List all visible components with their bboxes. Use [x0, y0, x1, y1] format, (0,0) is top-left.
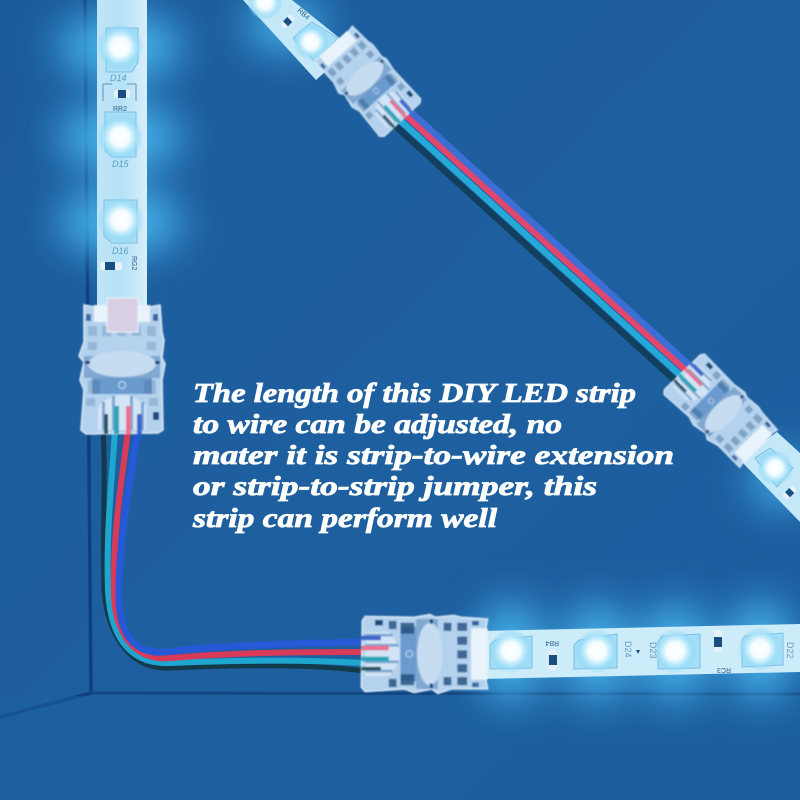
LED strip: bottom horizontal	[480, 624, 800, 679]
resistor RB4: RB4	[296, 7, 311, 22]
caption text: or strip-to-strip jumper, this	[193, 471, 597, 501]
strip labels and resistors: D23	[648, 642, 658, 659]
icon: RGB chip inside connector	[107, 298, 138, 332]
strip labels and resistors: RB4	[545, 639, 559, 646]
resistor right	[782, 485, 797, 500]
caption text: The length of this DIY LED strip	[193, 378, 636, 408]
strip labels and resistors: D15	[112, 159, 130, 169]
icon: LED right	[755, 448, 793, 487]
connector: left vertical	[79, 298, 165, 434]
strip labels and resistors: RR2	[113, 106, 127, 113]
LED strip: left vertical	[97, 0, 147, 312]
icon: LED D22	[738, 627, 783, 671]
icon: LED D23	[653, 629, 700, 673]
LED strip: top diagonal	[243, 0, 352, 80]
strip labels and resistors: RG2	[130, 256, 137, 270]
icon: LED D24	[574, 629, 619, 673]
caption text: to wire can be adjusted, no	[193, 409, 562, 439]
strip labels and resistors: D22	[785, 642, 795, 659]
connector: bottom horizontal	[361, 614, 488, 694]
caption text: strip can perform well	[192, 503, 498, 533]
strip labels and resistors: RC3	[717, 666, 731, 673]
icon: LED D15	[97, 112, 143, 160]
icon: LED D16	[98, 197, 144, 243]
strip labels and resistors: D14	[110, 73, 127, 83]
icon: LED D14	[97, 24, 143, 72]
strip labels and resistors: D24	[623, 641, 633, 658]
icon: LED upper	[247, 0, 283, 20]
strip labels and resistors	[100, 73, 137, 270]
connector: right diagonal	[661, 351, 780, 470]
wires: top connector to right connector	[385, 102, 698, 385]
caption text	[192, 378, 674, 533]
caption text: mater it is strip-to-wire extension	[193, 440, 674, 470]
strip labels and resistors: D16	[112, 246, 129, 256]
LED strip: right diagonal	[740, 432, 800, 522]
icon: LED lower	[293, 22, 338, 62]
strip labels and resistors	[545, 630, 795, 673]
connector: top diagonal	[311, 24, 424, 140]
wires: left connector to bottom connector	[103, 430, 365, 671]
icon: LED D25	[489, 629, 533, 673]
